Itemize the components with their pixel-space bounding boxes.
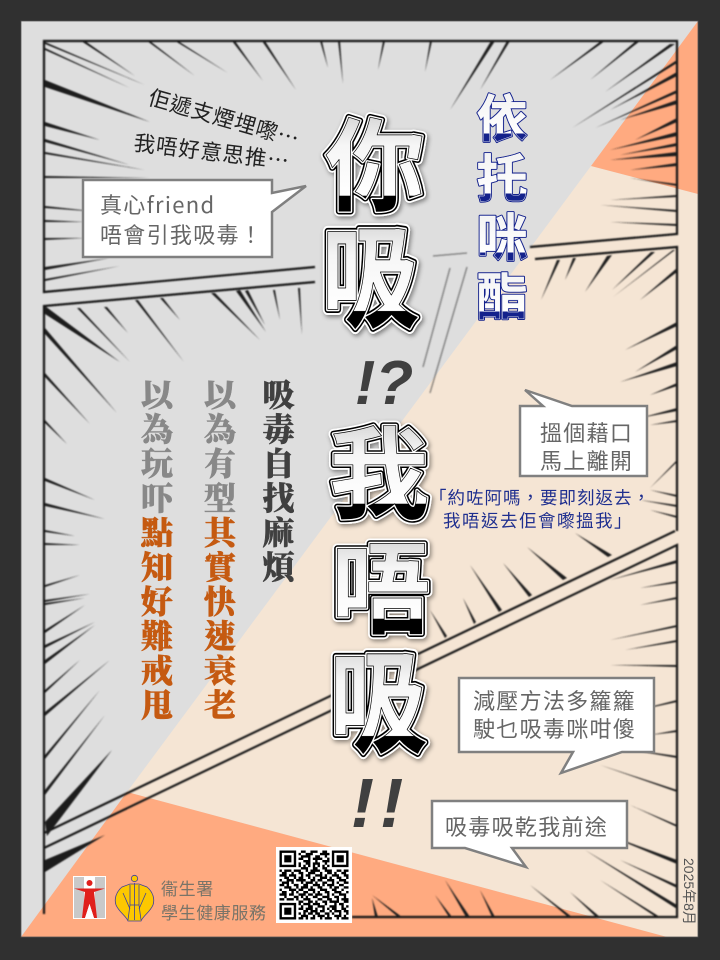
subtitle: 依托咪酯: 酯	[476, 269, 528, 326]
vertical slogan: 以為玩吓點知好難戒甩: 好	[141, 584, 173, 620]
vertical slogan: 吸毒自找麻煩: 煩	[262, 550, 296, 586]
subtitle: 依托咪酯: 依	[476, 91, 528, 148]
blue quote text	[429, 485, 651, 533]
vertical slogan: 以為玩吓點知好難戒甩: 以	[141, 377, 176, 413]
subtitle: 依托咪酯: 咪	[476, 210, 528, 267]
subtitle: 依托咪酯: 酯	[476, 269, 528, 326]
vertical slogan: 以為有型其實快速衰老: 型	[204, 480, 236, 516]
title: 你吸: 你	[325, 112, 425, 224]
title: 我唔吸: 唔	[331, 535, 431, 647]
title: 我唔吸: 唔	[331, 535, 431, 647]
vertical slogan: 吸毒自找麻煩: 麻	[262, 515, 295, 551]
vertical slogan: 吸毒自找麻煩	[262, 377, 296, 586]
speech bubble: 減壓方法多籮籮: 駛乜吸毒咪咁傻	[473, 712, 636, 744]
vertical slogan: 以為玩吓點知好難戒甩: 戒	[141, 653, 173, 689]
speech bubble: 搵個藉口	[520, 390, 647, 476]
blue quote text: 我唔返去佢會嚟搵我」	[443, 508, 633, 533]
title: 我唔吸: 吸	[330, 643, 426, 768]
icon: department of health logo	[74, 876, 106, 918]
title: 你吸: 你	[325, 112, 425, 224]
title: 我唔吸: 我	[329, 420, 429, 532]
vertical slogan: 以為玩吓點知好難戒甩: 知	[141, 550, 173, 586]
QR code	[276, 847, 352, 923]
title: 我唔吸: 唔	[331, 535, 431, 647]
organisation name: 衞生署	[161, 875, 214, 900]
vertical slogan: 吸毒自找麻煩: 毒	[262, 412, 295, 448]
speech bubble: 吸毒吸乾我前途: 吸毒吸乾我前途	[445, 810, 608, 842]
vertical slogan: 吸毒自找麻煩: 找	[262, 480, 295, 516]
handwritten thought line: 我唔好意思推: 我唔好意思推…	[132, 126, 292, 176]
title: 我唔吸: 我	[329, 420, 429, 532]
vertical slogan: 以為有型其實快速衰老: 實	[204, 550, 238, 586]
blue quote text: 「約咗阿嗎，要即刻返去，	[429, 485, 651, 510]
title: 你吸: 吸	[322, 218, 418, 343]
title: 你吸: 你	[325, 112, 425, 224]
title: 我唔吸: 吸	[330, 643, 426, 768]
vertical slogan: 以為玩吓點知好難戒甩: 吓	[141, 480, 176, 516]
vertical slogan: 以為有型其實快速衰老: 衰	[204, 653, 236, 689]
title punctuation: !!: !!	[351, 764, 409, 842]
title: 我唔吸: 我	[329, 420, 429, 532]
icon: student health service logo	[115, 875, 154, 921]
subtitle: 依托咪酯: 咪	[476, 210, 528, 267]
vertical slogan: 以為有型其實快速衰老: 老	[204, 688, 236, 724]
vertical slogan: 以為有型其實快速衰老: 其	[204, 515, 242, 551]
vertical slogan: 以為玩吓點知好難戒甩: 難	[141, 618, 173, 654]
title: 你吸: 你	[325, 112, 425, 224]
handwritten thought line: 佢遞支煙埋嚟: 佢遞支煙埋嚟…	[145, 81, 304, 154]
vertical slogan: 以為玩吓點知好難戒甩: 點	[140, 515, 173, 551]
title: 我唔吸	[329, 420, 431, 768]
speech bubble: 真心friend: 真心friend	[100, 188, 215, 220]
subtitle: 依托咪酯: 托	[476, 151, 528, 208]
vertical slogan: 以為有型其實快速衰老: 為	[204, 412, 236, 448]
subtitle: 依托咪酯: 依	[476, 91, 528, 148]
title: 我唔吸: 唔	[331, 535, 431, 647]
title: 你吸: 吸	[322, 218, 418, 343]
speech bubble: 搵個藉口: 馬上離閞	[540, 444, 633, 476]
speech bubble: 真心friend	[83, 180, 306, 257]
vertical slogan: 以為玩吓點知好難戒甩: 甩	[141, 688, 173, 724]
vertical slogan: 以為玩吓點知好難戒甩	[140, 377, 176, 724]
vertical slogan: 吸毒自找麻煩: 自	[262, 446, 295, 482]
subtitle: 依托咪酯	[476, 91, 528, 326]
title: 你吸	[322, 112, 425, 343]
vertical slogan: 以為有型其實快速衰老: 以	[204, 377, 239, 413]
speech bubble: 減壓方法多籮籮	[459, 678, 654, 773]
title: 我唔吸: 我	[329, 420, 429, 532]
date: 2025年8月	[681, 858, 697, 925]
title: 我唔吸: 吸	[330, 643, 426, 768]
vertical slogan: 以為玩吓點知好難戒甩: 玩	[141, 446, 173, 482]
vertical slogan: 以為有型其實快速衰老	[204, 377, 242, 724]
vertical slogan: 以為玩吓點知好難戒甩: 為	[141, 412, 173, 448]
title punctuation: !?: !?	[355, 349, 413, 418]
title: 你吸: 吸	[322, 218, 418, 343]
speech bubble: 吸毒吸乾我前途	[432, 801, 627, 867]
speech bubble: 真心friend: 唔會引我吸毒！	[100, 218, 263, 250]
vertical slogan: 以為有型其實快速衰老: 速	[204, 618, 237, 654]
vertical slogan: 吸毒自找麻煩: 吸	[262, 377, 295, 413]
organisation name	[161, 875, 267, 924]
organisation name: 學生健康服務	[161, 899, 267, 924]
vertical slogan: 以為有型其實快速衰老: 有	[204, 446, 236, 482]
title: 我唔吸: 吸	[330, 643, 426, 768]
subtitle: 依托咪酯: 托	[476, 151, 528, 208]
title: 你吸: 吸	[322, 218, 418, 343]
speech bubble: 搵個藉口: 搵個藉口	[540, 416, 633, 448]
speech bubble: 減壓方法多籮籮: 減壓方法多籮籮	[473, 684, 636, 716]
vertical slogan: 以為有型其實快速衰老: 快	[204, 584, 238, 620]
